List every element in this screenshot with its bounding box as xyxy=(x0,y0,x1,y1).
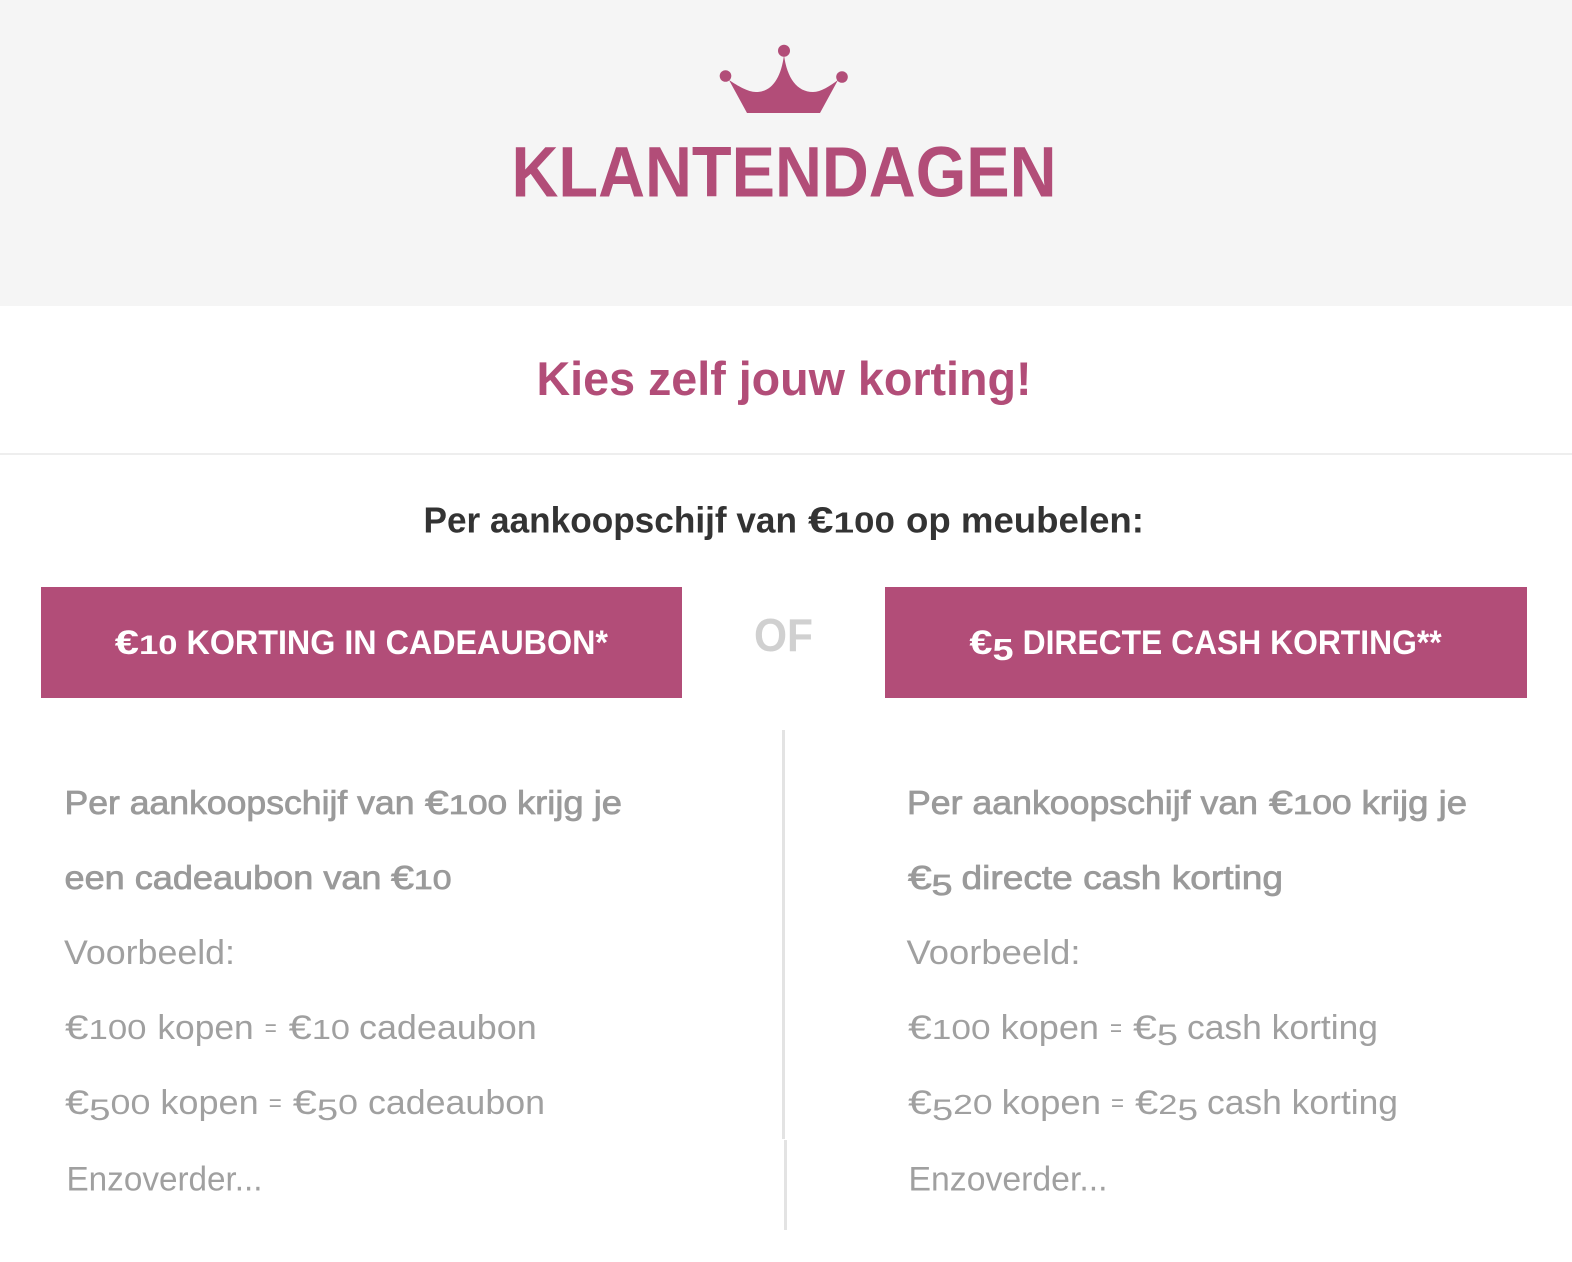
right examples: 5 xyxy=(932,1094,953,1127)
right examples: kopen xyxy=(1002,1084,1101,1122)
icon: crown xyxy=(720,45,848,113)
left examples: cadeaubon xyxy=(368,1084,545,1122)
right examples: = xyxy=(1110,1015,1122,1042)
left examples: 5 xyxy=(89,1094,111,1127)
left examples: €100 xyxy=(65,1009,146,1047)
right examples: 5 xyxy=(1157,1019,1178,1052)
intro text xyxy=(424,500,1144,541)
right explanation: krijg je xyxy=(1362,784,1467,821)
intro text: op meubelen: xyxy=(906,500,1144,541)
right examples: € xyxy=(908,1084,927,1122)
left explanation: €10 xyxy=(391,859,452,896)
right examples: 5 xyxy=(1177,1094,1198,1127)
title: KLANTENDAGEN xyxy=(512,134,1056,213)
right examples: = xyxy=(1111,1090,1124,1117)
right explanation xyxy=(907,784,1467,902)
left examples: Enzoverder... xyxy=(66,1161,262,1199)
left examples: 0 xyxy=(338,1089,358,1120)
option button: direct cash discount xyxy=(885,587,1527,698)
left examples: Voorbeeld: xyxy=(64,934,235,972)
option button: gift voucher discount: €10 xyxy=(115,624,178,662)
right examples: €2 xyxy=(1135,1084,1174,1122)
left examples: kopen xyxy=(157,1009,254,1047)
right examples: €100 xyxy=(908,1009,991,1047)
left explanation: Per aankoopschijf van xyxy=(64,784,414,821)
left examples: = xyxy=(265,1015,277,1042)
right examples: cash korting xyxy=(1207,1084,1398,1122)
right examples xyxy=(906,934,1398,1199)
left column: gift voucher details xyxy=(64,784,622,1199)
right examples: Voorbeeld: xyxy=(906,934,1080,972)
subtitle: Kies zelf jouw korting! xyxy=(536,352,1032,405)
left examples: cadeaubon xyxy=(359,1009,537,1047)
right examples: € xyxy=(1133,1009,1152,1047)
or label: OF xyxy=(754,609,813,661)
option button: direct cash discount: DIRECTE CASH KORTING** xyxy=(1023,624,1442,662)
right examples: Enzoverder... xyxy=(908,1161,1108,1199)
left explanation: €100 xyxy=(425,784,507,821)
left examples: 5 xyxy=(317,1094,338,1127)
left examples: € xyxy=(293,1084,312,1122)
option button: gift voucher discount: KORTING IN CADEAUBON* xyxy=(186,624,609,662)
right column: cash discount details xyxy=(906,784,1467,1199)
right explanation: 5 xyxy=(932,870,952,902)
left examples: €10 xyxy=(289,1009,350,1047)
column divider xyxy=(782,730,787,1230)
option button: gift voucher discount xyxy=(41,587,682,698)
right examples: cash korting xyxy=(1187,1009,1378,1047)
header panel xyxy=(0,0,1572,306)
right examples: 20 xyxy=(953,1089,993,1120)
intro text: €100 xyxy=(808,500,895,541)
right explanation: Per aankoopschijf van xyxy=(907,784,1258,821)
left examples xyxy=(64,934,545,1199)
intro text: Per aankoopschijf van xyxy=(424,500,797,541)
left examples: kopen xyxy=(160,1084,259,1122)
option button: direct cash discount: 5 xyxy=(993,632,1014,667)
left examples: 00 xyxy=(111,1089,150,1120)
left examples: = xyxy=(269,1090,282,1117)
right explanation: € xyxy=(908,859,926,896)
right explanation: €100 xyxy=(1269,784,1352,821)
left examples: € xyxy=(65,1084,84,1122)
left explanation: een cadeaubon van xyxy=(64,859,382,896)
option button: direct cash discount: € xyxy=(969,624,988,662)
left explanation xyxy=(64,784,622,896)
right examples: kopen xyxy=(1001,1009,1099,1047)
right explanation: directe cash korting xyxy=(962,859,1283,896)
left explanation: krijg je xyxy=(517,784,622,821)
